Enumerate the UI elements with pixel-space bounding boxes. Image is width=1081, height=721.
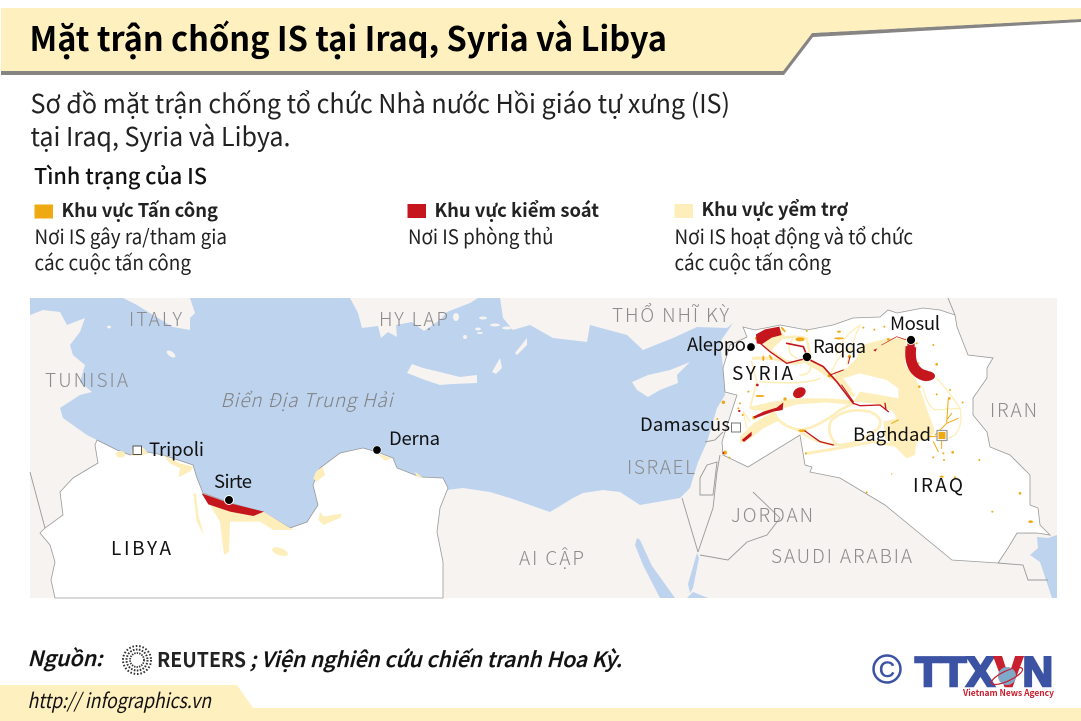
city labels: Raqqa xyxy=(813,333,866,359)
controlled zone xyxy=(202,493,264,516)
legend item: attack zone xyxy=(34,196,227,276)
country labels: IRAQ xyxy=(913,471,963,498)
subtitle xyxy=(30,84,730,154)
TTXVN logo: C xyxy=(879,657,895,682)
legend item: attack zone: Khu vực Tấn công xyxy=(62,196,219,223)
support zones xyxy=(116,448,423,558)
attack zones xyxy=(716,326,1033,523)
country labels: THỔ NHĨ KỲ xyxy=(612,301,729,328)
legend xyxy=(34,159,913,276)
legend item: support zone xyxy=(674,195,913,276)
country labels: LIBYA xyxy=(111,534,171,561)
country labels: ISRAEL xyxy=(627,453,695,480)
TTXVN logo: Vietnam News Agency xyxy=(962,686,1055,699)
country labels: ITALY xyxy=(129,305,182,332)
city markers xyxy=(133,336,947,504)
title: Mặt trận chống IS tại Iraq, Syria và Libya xyxy=(30,12,667,61)
city labels xyxy=(149,310,940,494)
legend item: support zone: các cuộc tấn công xyxy=(674,247,831,276)
city labels: Derna xyxy=(389,425,440,451)
legend item: control zone: Nơi IS phòng thủ xyxy=(408,221,554,250)
country labels: SAUDI ARABIA xyxy=(771,542,913,569)
legend item: attack zone: các cuộc tấn công xyxy=(34,247,191,276)
Libya xyxy=(40,440,448,598)
legend item: support zone: Khu vực yểm trợ xyxy=(702,195,848,222)
subtitle: tại Iraq, Syria và Libya. xyxy=(30,117,290,154)
Syria and Iraq xyxy=(722,308,1050,563)
legend heading: Tình trạng của IS xyxy=(34,159,207,191)
city labels: Aleppo xyxy=(687,331,746,357)
legend item: support zone: Nơi IS hoạt động và tổ chức xyxy=(674,221,913,250)
land: Crete xyxy=(407,364,477,385)
source line: Nguồn: xyxy=(28,643,104,673)
legend item: control zone xyxy=(408,196,599,250)
controlled zones xyxy=(722,327,935,454)
country labels: JORDAN xyxy=(731,501,813,528)
source line: ; Viện nghiên cứu chiến tranh Hoa Kỳ. xyxy=(250,644,622,674)
sea label: Biển Địa Trung Hải xyxy=(220,386,395,413)
country labels: IRAN xyxy=(990,396,1037,423)
TTXVN logo: TTXVN xyxy=(915,648,1053,695)
country labels: HY LẠP xyxy=(379,305,448,332)
country labels: AI CẬP xyxy=(519,544,584,571)
country labels: SYRIA xyxy=(732,359,793,386)
website: http:// infographics.vn xyxy=(28,684,212,714)
land: small islands xyxy=(107,313,527,374)
icon: copyright xyxy=(874,656,900,682)
neighbouring borders xyxy=(30,298,1048,580)
city labels: Tripoli xyxy=(149,436,204,462)
map xyxy=(30,298,1057,598)
city labels: Mosul xyxy=(890,310,940,336)
city labels: Sirte xyxy=(214,468,252,494)
legend item: control zone: Khu vực kiểm soát xyxy=(434,196,599,223)
footer band xyxy=(0,685,1081,721)
source line xyxy=(28,643,622,674)
IS zones: Libya xyxy=(116,448,423,558)
land: Cyprus xyxy=(632,362,690,397)
country labels xyxy=(45,301,1037,571)
water: Red Sea gulfs and Persian Gulf xyxy=(635,535,1057,598)
land: north Africa, Levant, Turkey xyxy=(30,298,1057,598)
subtitle: Sơ đồ mặt trận chống tổ chức Nhà nước Hồi giáo tự xưng (IS) xyxy=(30,84,730,121)
land: Greece xyxy=(350,298,478,338)
icon: Reuters dotted globe xyxy=(123,646,151,674)
source line: REUTERS xyxy=(157,644,246,673)
city labels: Baghdad xyxy=(853,421,931,447)
city labels: Damascus xyxy=(640,411,730,437)
country labels: TUNISIA xyxy=(45,366,129,393)
land: Italy xyxy=(123,298,195,330)
support zones xyxy=(740,328,935,458)
title banner xyxy=(1,8,1081,75)
legend item: attack zone: Nơi IS gây ra/tham gia xyxy=(34,221,227,250)
IS zones: Iraq and Syria xyxy=(716,325,1033,523)
